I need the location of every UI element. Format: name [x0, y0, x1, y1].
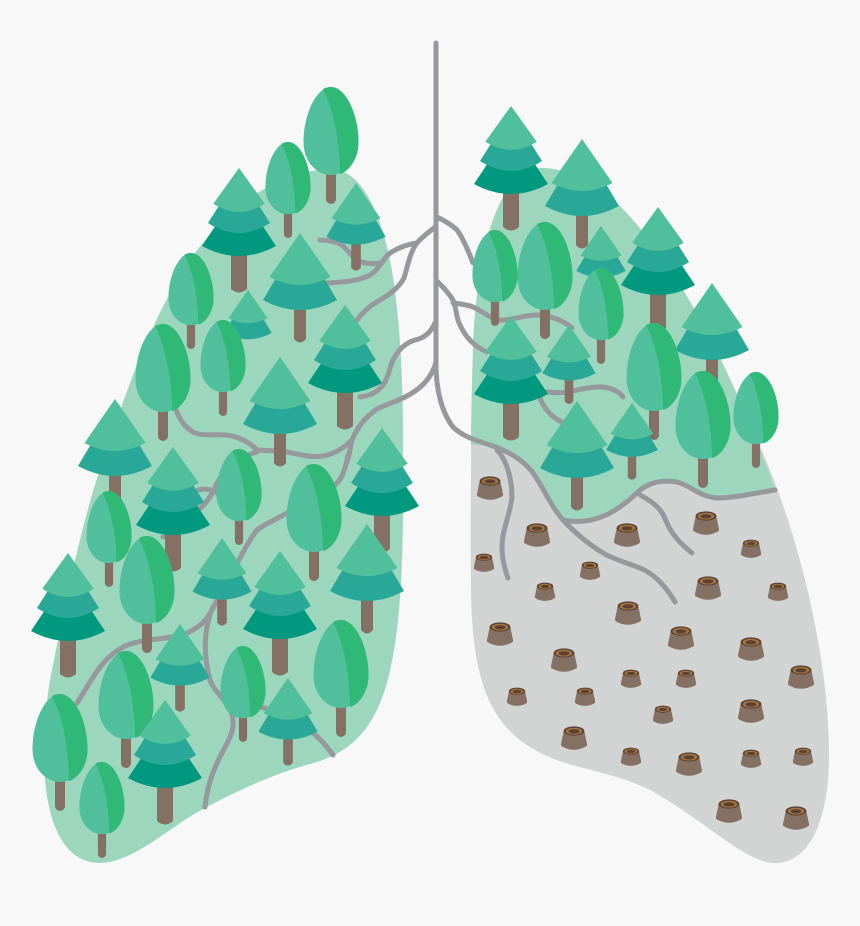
stump	[693, 511, 719, 535]
stump	[738, 637, 764, 661]
tree: large round	[120, 536, 174, 653]
tree: small round	[220, 646, 266, 742]
stump	[474, 554, 494, 572]
tree: three-tier pine	[243, 551, 317, 676]
stump	[561, 726, 587, 750]
tree: large round	[676, 371, 730, 488]
tree: pine right	[330, 524, 404, 634]
stump	[676, 752, 702, 776]
tree: small pine	[606, 403, 658, 480]
stump	[695, 576, 721, 600]
left lung shape	[44, 170, 403, 863]
tree: small pine	[150, 624, 210, 712]
stump	[524, 523, 550, 547]
tree: three-tier pine	[621, 207, 695, 332]
tree: large round	[98, 651, 154, 768]
right lung forested area	[471, 168, 776, 521]
stump	[741, 540, 761, 558]
stump	[793, 748, 813, 766]
stump	[621, 670, 641, 688]
stump	[738, 699, 764, 723]
tree: three-tier pine	[136, 447, 210, 572]
tree: three-tier pine	[308, 305, 382, 430]
stump	[487, 622, 513, 646]
tree: pine	[243, 357, 317, 466]
tree: small round	[168, 253, 214, 349]
tree: small round	[216, 449, 262, 545]
tree: pine	[540, 401, 614, 510]
stump	[783, 806, 809, 830]
tree: small pine behind, trunk hidden	[224, 290, 272, 339]
stump	[788, 665, 814, 689]
tree: pine centre	[263, 233, 337, 342]
tree: three-tier pine top	[474, 106, 548, 230]
tree: pine top	[545, 139, 619, 248]
tree: small round bottom	[79, 762, 125, 858]
tree: three-tier pine far left	[31, 553, 105, 678]
stump	[551, 648, 577, 672]
panel: left lung forest	[31, 87, 419, 858]
tree: small pine top	[326, 183, 386, 271]
tree: pine right	[675, 283, 749, 392]
tree: small round	[86, 491, 132, 587]
tree: small pine	[542, 325, 596, 404]
panel: tree stumps in cleared lung	[474, 476, 814, 830]
tree: three-tier pine bottom	[128, 700, 202, 824]
stump	[676, 670, 696, 688]
stump	[477, 476, 503, 500]
tree: small round	[472, 230, 518, 326]
stump	[716, 799, 742, 823]
stump	[507, 688, 527, 706]
tree: large round	[626, 323, 682, 440]
stump	[668, 626, 694, 650]
stump	[741, 750, 761, 768]
tree: small round	[578, 268, 624, 364]
stump	[621, 748, 641, 766]
stump	[575, 688, 595, 706]
tree: large round top	[304, 87, 358, 204]
tree: three-tier pine	[345, 428, 419, 552]
tree: large round	[286, 464, 342, 581]
tree: three-tier pine	[202, 168, 276, 292]
tree: small pine	[192, 538, 252, 626]
tree: large round	[314, 620, 368, 737]
tree: large round	[518, 222, 572, 339]
tree: small round right	[733, 372, 779, 468]
tree: large round	[136, 324, 190, 441]
tree: small round	[200, 320, 246, 416]
tree: small pine behind	[576, 226, 626, 299]
airways: trachea and bronchi	[77, 43, 775, 807]
tree: pine far left	[78, 399, 152, 508]
tree: small round top	[265, 142, 311, 238]
tree: three-tier pine	[474, 316, 548, 440]
stump	[615, 601, 641, 625]
stump	[768, 583, 788, 601]
stump	[535, 583, 555, 601]
tree: small pine	[258, 678, 318, 766]
stump	[614, 523, 640, 547]
right lung shape, cleared grey area	[471, 168, 829, 863]
tree: large round bottom left	[32, 694, 88, 811]
panel: right lung forest	[472, 106, 779, 510]
stump	[580, 562, 600, 580]
stump	[653, 706, 673, 724]
